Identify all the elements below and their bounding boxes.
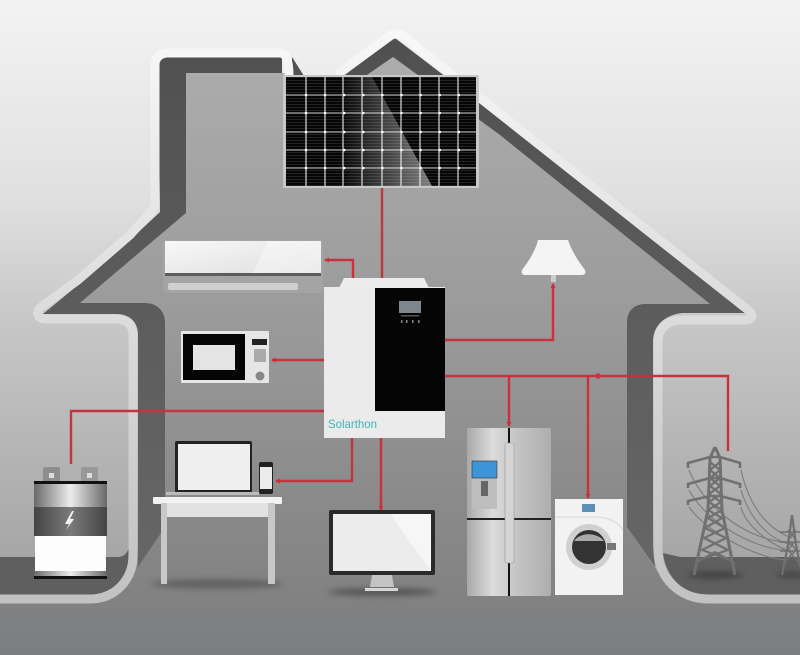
laptop and phone on table <box>151 441 283 589</box>
lightning bolt <box>65 511 74 530</box>
floor left room <box>0 548 129 595</box>
inverter <box>324 278 445 438</box>
power cables <box>689 470 792 560</box>
dark fold of house wall <box>43 38 747 567</box>
lamp <box>522 240 585 282</box>
floor right room <box>663 553 800 595</box>
microwave <box>181 331 269 383</box>
transmission tower large <box>687 447 792 579</box>
power lines <box>71 188 728 510</box>
table <box>151 497 283 589</box>
washing machine <box>555 499 623 595</box>
monitor <box>328 510 436 596</box>
air conditioner <box>163 240 323 293</box>
brand logo: Solarthon <box>328 417 377 431</box>
refrigerator <box>467 428 551 596</box>
solar panel <box>283 75 479 188</box>
battery <box>34 467 107 579</box>
transmission tower small <box>776 515 800 578</box>
